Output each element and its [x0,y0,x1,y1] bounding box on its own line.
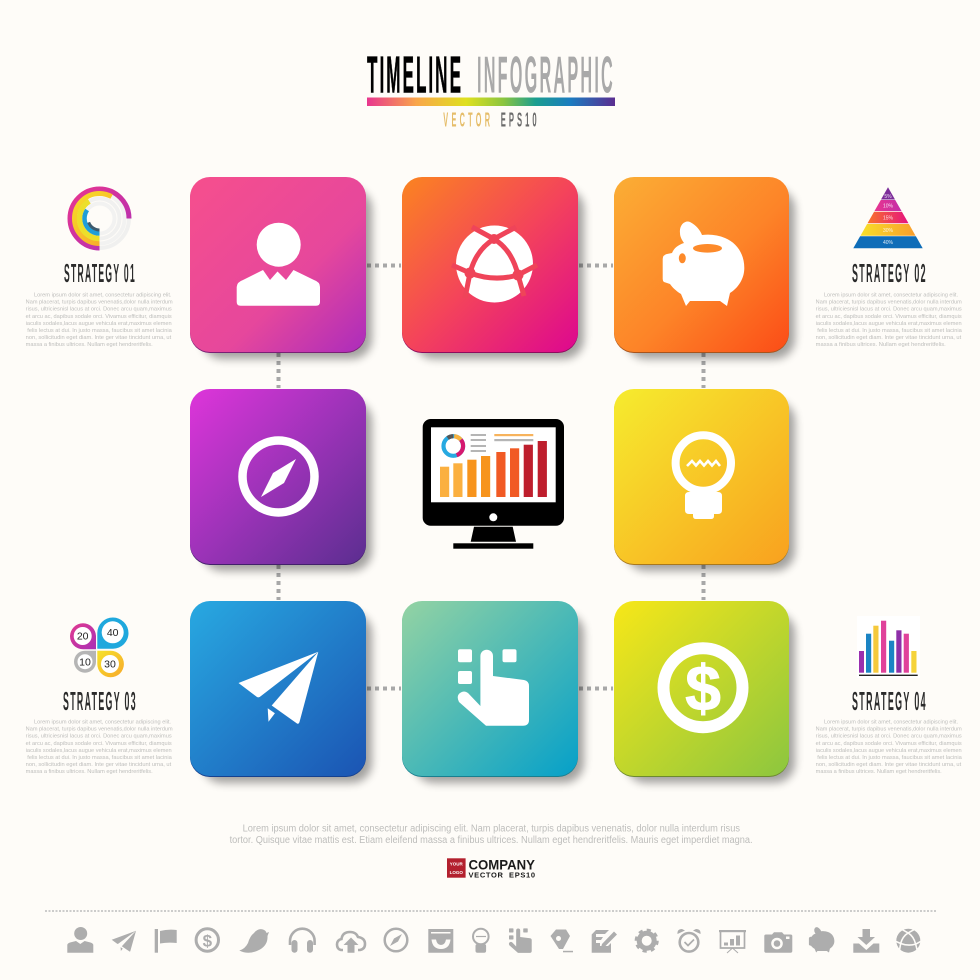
card: paper plane [190,601,372,783]
icon: bar chart [857,616,920,678]
text block: Lorem ipsum dolor sit amet, consectetur adipiscing elit. [824,720,958,726]
connector dots [278,266,704,688]
text block: iaculis sodales,lacus augue vehicula erat,maximus elemen [26,321,172,327]
icon: dollar coin: $ [685,652,721,724]
footer text [230,824,753,846]
icon: ring chart [70,189,129,248]
card: piggy bank [614,177,795,359]
icon: plane [112,931,136,952]
text block: et arcu ac, dapibus sodale orci. Vivamus efficitur, diamquis [816,741,962,747]
company logo: YOUR [450,862,464,866]
text: STRATEGY 01 [64,258,136,288]
monitor bar chart [440,441,547,497]
icon: compass [385,929,407,951]
icon: touch hand [458,649,529,726]
card: touch hand [402,601,584,783]
icon: pyramid: 40% [883,240,894,246]
text block: Lorem ipsum dolor sit amet, consectetur adipiscing elit. [34,292,172,298]
text block: Nam placerat, turpis dapibus venenatis,dolor nulla interdum [26,727,173,733]
text block: felis lectus at dui. In justo massa, faucibus sit amet lacinia [817,328,962,334]
icon: pyramid [853,187,923,248]
text block: iaculis sodales,lacus augue vehicula erat,maximus elemen [816,748,962,754]
icon: camera [764,932,792,953]
icon: user [237,223,320,306]
dotted divider [45,910,937,912]
text block: risus, ultriciesnisl lacus at orci. Donec arcu quam,maximus [26,734,172,740]
text block: risus, ultriciesnisl lacus at orci. Donec arcu quam,maximus [816,307,962,313]
text block: iaculis sodales,lacus augue vehicula erat,maximus elemen [816,321,962,327]
icon: gear [636,930,657,951]
card: globe [402,177,584,359]
card: dollar coin [614,601,795,783]
icon: pen nib [550,930,573,952]
footer text: Lorem ipsum dolor sit amet, consectetur adipiscing elit. Nam placerat, turpis dapibus venenatis, dolor nulla interdum risus [243,824,740,834]
text block [816,292,962,348]
icon: flag [155,929,177,953]
icon: pin chart [70,618,128,677]
panel: strategy 04 [816,616,962,775]
icon: pyramid: 10% [883,204,894,210]
text block: Nam placerat, turpis dapibus venenatis,dolor nulla interdum [816,300,962,306]
icon: dollar [196,929,218,951]
monitor [423,419,564,549]
panel: strategy 01 [26,189,173,348]
panel: strategy 03 [26,618,173,775]
card: user [190,177,372,359]
text block: et arcu ac, dapibus sodale orci. Vivamus efficitur, diamquis [816,314,962,320]
icon: paper plane [238,652,318,724]
text block: felis lectus at dui. In justo massa, faucibus sit amet lacinia [27,328,172,334]
icon: light bulb [676,435,731,519]
text block: massa a finibus ultrices. Nullam eget hendreritfelis. [816,342,946,348]
text block: massa a finibus ultrices. Nullam eget hendreritfelis. [816,769,942,775]
icon: alarm clock [677,929,701,952]
text block [816,720,962,775]
title: EPS10 [501,110,540,132]
icon: compass [242,440,314,512]
text block: Lorem ipsum dolor sit amet, consectetur adipiscing elit. [34,720,171,726]
icon: pin chart: 20 [77,631,89,643]
icon: bird [239,929,269,953]
text block: Nam placerat, turpis dapibus venenatis,dolor nulla interdum [816,727,962,733]
icon: piggy bank [663,222,744,306]
bottom icon row [67,927,921,953]
text block: non, sollicitudin eget diam. Inte ger vitae tincidunt urna, ut [26,762,172,768]
panel: strategy 03: STRATEGY 03 [63,686,137,716]
icon: bulb [473,929,489,953]
icon: download [853,929,879,953]
title: VECTOR [443,110,493,132]
text block: et arcu ac, dapibus sodale orci. Vivamus efficitur, diamquis [26,741,172,747]
title: TIMELINE [367,45,463,103]
icon: edit form [592,930,617,953]
title [367,45,615,132]
text block: felis lectus at dui. In justo massa, faucibus sit amet lacinia [817,755,962,761]
icon: dollar coin [664,648,742,727]
icon: dollar: $ [203,931,213,950]
icon: pyramid: 30% [883,228,894,234]
icon: user [67,927,93,953]
text block [26,292,173,348]
text block: massa a finibus ultrices. Nullam eget hendreritfelis. [26,769,153,775]
icon: headphones [290,929,315,953]
icon: globe [896,929,921,953]
text block: felis lectus at dui. In justo massa, faucibus sit amet lacinia [27,755,172,761]
panel: strategy 02 [816,187,962,348]
footer text: tortor. Quisque vitae mattis est. Etiam eleifend massa a finibus ultrices. Nullam eget hendreritfelis. Mauris eget imperdiet magna. [230,835,753,846]
text block: non, sollicitudin eget diam. Inte ger vitae tincidunt urna, ut [26,335,172,341]
text block: non, sollicitudin eget diam. Inte ger vitae tincidunt urna, ut [816,762,962,768]
card: compass [190,389,372,571]
text block: et arcu ac, dapibus sodale orci. Vivamus efficitur, diamquis [26,314,172,320]
icon: cloud upload [337,932,365,953]
company logo: LOGO [450,870,463,875]
text block: risus, ultriciesnisl lacus at orci. Donec arcu quam,maximus [26,307,172,313]
icon: presentation [719,930,746,953]
card: light bulb [614,389,795,571]
text: INFOGRAPHIC [477,45,615,103]
text block: iaculis sodales,lacus augue vehicula erat,maximus elemen [26,748,172,754]
company logo: COMPANY [468,856,536,872]
icon: piggy bank [809,927,834,952]
icon: pin chart: 40 [107,627,119,639]
icon: archive box [428,929,453,953]
text block: non, sollicitudin eget diam. Inte ger vitae tincidunt urna, ut [816,335,962,341]
icon: pin chart: 30 [104,659,116,671]
company logo: VECTOR EPS10 [468,870,535,880]
icon: hand [509,928,532,953]
monitor donut [439,432,467,460]
text block: risus, ultriciesnisl lacus at orci. Donec arcu quam,maximus [816,734,962,740]
text block [26,720,173,775]
monitor legend [471,434,533,452]
text block: Lorem ipsum dolor sit amet, consectetur adipiscing elit. [824,292,958,298]
company logo [447,856,536,880]
text block: Nam placerat, turpis dapibus venenatis,dolor nulla interdum [26,300,173,306]
icon: pyramid: 15% [883,216,894,222]
icon: globe [452,226,537,302]
icon: pyramid: 5% [884,194,892,200]
text block: massa a finibus ultrices. Nullam eget hendreritfelis. [26,342,153,348]
icon: pin chart: 10 [79,656,91,668]
